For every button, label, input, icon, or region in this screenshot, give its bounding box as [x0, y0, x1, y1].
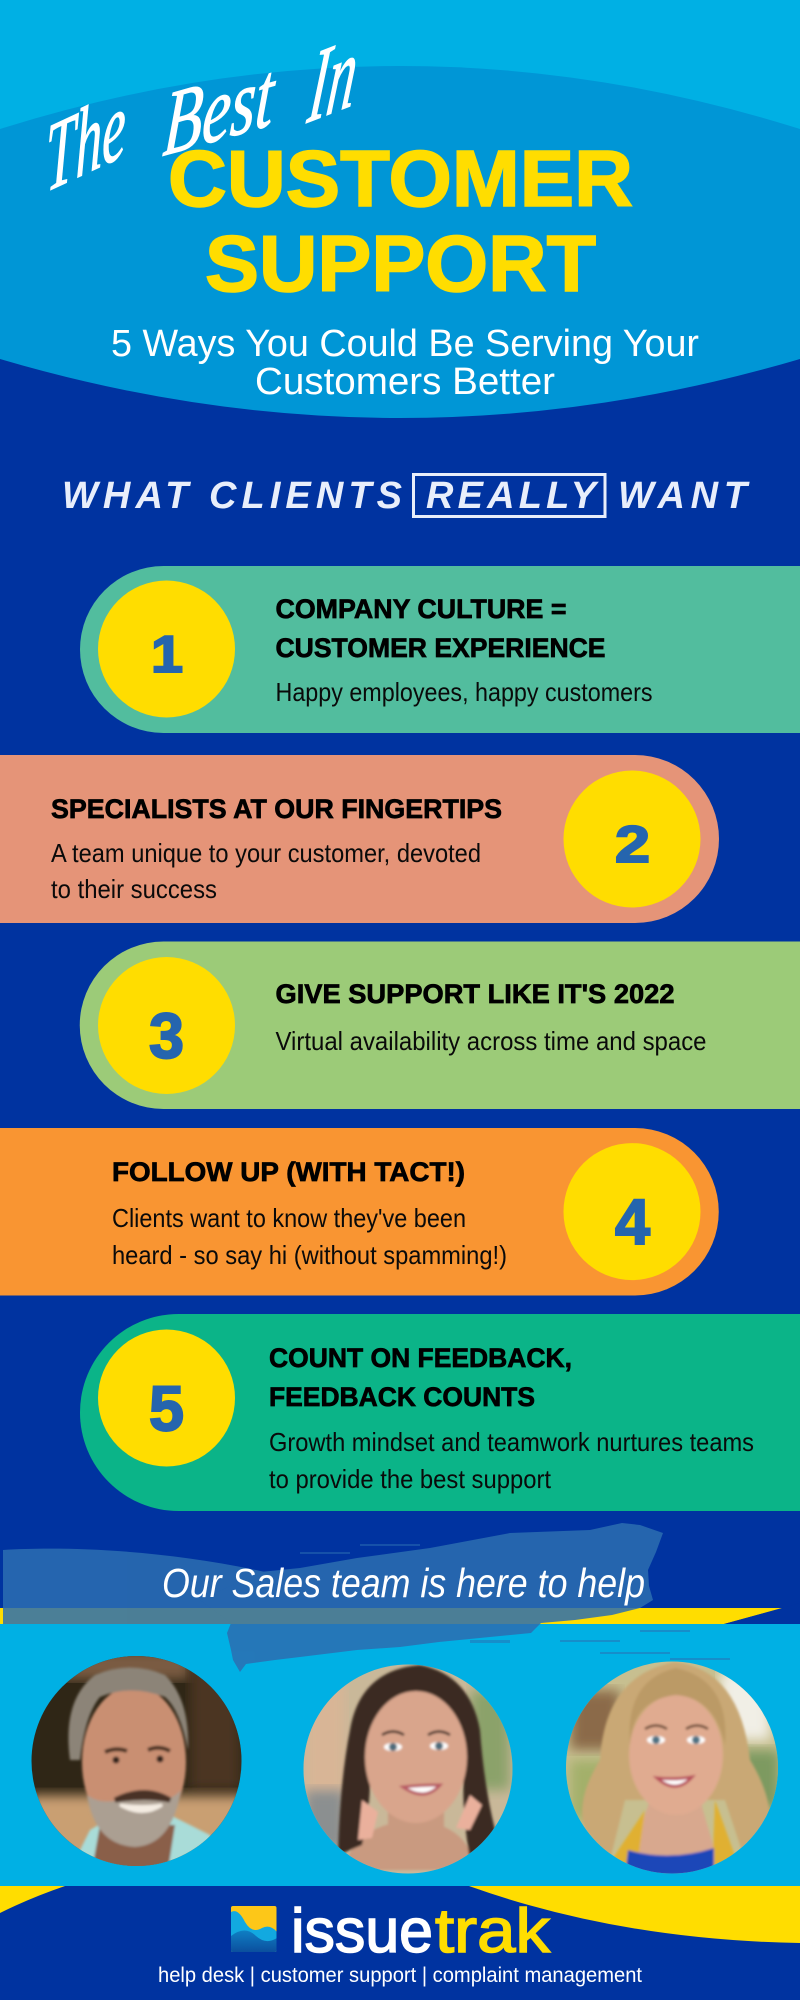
heading and text 1: COMPANY CULTURE =: [276, 594, 566, 624]
subtitle: 5 Ways You Could Be Serving Your: [111, 323, 699, 365]
section heading: what clients really want: [62, 474, 750, 517]
heading and text 4: Clients want to know they've been: [112, 1203, 466, 1233]
heading and text 5: COUNT ON FEEDBACK,: [269, 1343, 572, 1373]
number badge 2: [564, 770, 700, 908]
number badge 5: [98, 1330, 235, 1466]
number badge 4: [564, 1143, 700, 1280]
number badge 4: 4: [615, 1186, 650, 1258]
logo: issuetrak: issue: [291, 1897, 433, 1966]
heading and text 3: Virtual availability across time and space: [276, 1026, 706, 1056]
script title: The Best In: [46, 11, 364, 214]
number badge 1: [98, 580, 235, 718]
sales team band background: [0, 1603, 800, 1886]
heading and text 4: heard - so say hi (without spamming!): [112, 1240, 507, 1270]
heading and text 1: Happy employees, happy customers: [276, 677, 652, 707]
photo: man: [28, 1650, 248, 1870]
subtitle: [111, 323, 699, 403]
heading and text 5: FEEDBACK COUNTS: [269, 1382, 535, 1412]
title: customer support: CUSTOMER: [168, 134, 633, 223]
panel: item 3 give support: [80, 942, 800, 1109]
heading and text 2: [51, 794, 502, 904]
panel: item 5 feedback: [80, 1314, 800, 1511]
number badge 1: 1: [151, 626, 183, 684]
heading and text 2: A team unique to your customer, devoted: [51, 838, 481, 868]
heading and text 4: [112, 1157, 507, 1270]
heading and text 2: to their success: [51, 874, 217, 904]
title: customer support: SUPPORT: [205, 219, 596, 308]
script title: The Best In: Best: [161, 41, 279, 177]
heading and text 1: [276, 594, 652, 707]
heading and text 3: [276, 979, 706, 1056]
heading and text 5: to provide the best support: [269, 1464, 552, 1494]
script title: The Best In: The: [46, 69, 126, 214]
heading and text 5: [269, 1343, 754, 1494]
heading and text 5: Growth mindset and teamwork nurtures teams: [269, 1427, 754, 1457]
panel: item 1 company culture: [80, 566, 800, 733]
section heading: what clients really want: WANT: [618, 475, 750, 517]
number badge 5: 5: [149, 1372, 184, 1444]
title: customer support: [168, 134, 633, 308]
logo: issuetrak: trak: [435, 1897, 551, 1966]
blue wave and brush stroke: [3, 1523, 730, 1672]
photo: woman with blonde hair: [564, 1660, 780, 1876]
subtitle: Customers Better: [255, 361, 555, 403]
heading and text 3: GIVE SUPPORT LIKE IT'S 2022: [276, 979, 674, 1009]
script title: The Best In: In: [303, 11, 364, 146]
heading and text 4: FOLLOW UP (WITH TACT!): [112, 1157, 465, 1187]
footer yellow corner shapes: [0, 1886, 800, 1943]
photo: woman with dark hair: [300, 1660, 516, 1876]
number badge 3: [98, 957, 235, 1094]
panel: item 4 follow up: [0, 1128, 719, 1296]
tagline: our sales team: Our Sales team is here to help: [162, 1560, 645, 1606]
panel: item 2 specialists: [0, 755, 719, 923]
logo: issuetrak: [231, 1906, 552, 1954]
heading and text 1: CUSTOMER EXPERIENCE: [276, 633, 606, 663]
heading and text 2: SPECIALISTS AT OUR FINGERTIPS: [51, 794, 502, 824]
logo icon: [231, 1906, 277, 1952]
footer tagline: help desk | customer support | complaint management: [158, 1964, 642, 1987]
section heading: what clients really want: WHAT CLIENTS: [62, 475, 402, 517]
number badge 2: 2: [615, 816, 650, 874]
number badge 3: 3: [149, 1000, 184, 1072]
section heading: what clients really want: REALLY: [426, 475, 600, 517]
